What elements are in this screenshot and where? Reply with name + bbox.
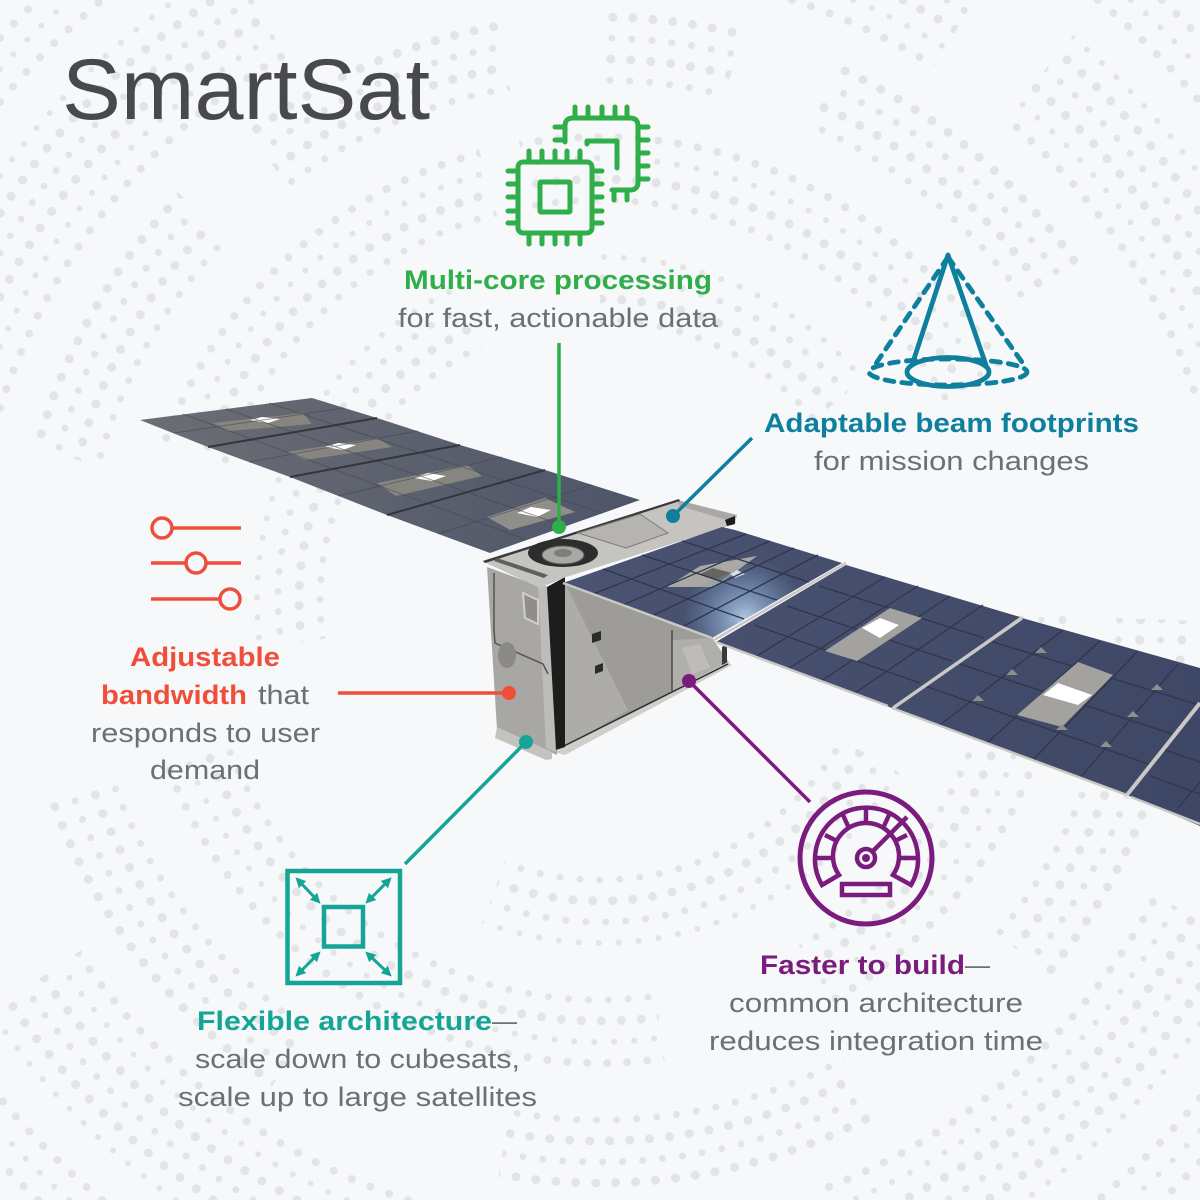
icon: speedometer (800, 792, 932, 924)
heading: faster to build: Faster to build (760, 950, 965, 980)
heading: adjustable bandwidth: responds to user (91, 718, 320, 748)
top plate (482, 500, 737, 588)
heading: faster to build: reduces integration time (709, 1026, 1043, 1056)
heading: adjustable bandwidth: that (258, 680, 310, 710)
near solar array (563, 527, 1200, 826)
heading: adaptable beam footprints: Adaptable beam footprints (764, 408, 1139, 438)
far solar array (140, 398, 640, 553)
heading: flexible architecture: scale down to cubesats, (195, 1044, 520, 1074)
heading: faster to build (709, 950, 1043, 1056)
leader: flexible architecture (405, 735, 533, 864)
left face (487, 567, 557, 755)
section 2 (716, 565, 1020, 708)
heading: adjustable bandwidth: bandwidth (101, 680, 247, 710)
section 4 (1127, 703, 1200, 826)
section 3 (892, 618, 1200, 795)
icon: flexible architecture (288, 871, 400, 983)
heading: faster to build: — (965, 950, 990, 980)
heading: adaptable beam footprints: for mission changes (814, 446, 1089, 476)
heading: adjustable bandwidth: demand (150, 755, 260, 785)
heading: flexible architecture (178, 1006, 537, 1112)
heading: flexible architecture: scale up to large satellites (178, 1082, 537, 1112)
heading: faster to build: common architecture (729, 988, 1023, 1018)
heading: multi-core processing (398, 265, 719, 333)
title: SmartSat (62, 42, 430, 138)
heading: adjustable bandwidth (91, 642, 320, 785)
right face (562, 583, 730, 750)
leader: adaptable beam (666, 438, 752, 523)
leader: adjustable bandwidth (338, 686, 516, 700)
heading: flexible architecture: Flexible architecture (197, 1006, 492, 1036)
leader: multi-core processing (552, 343, 566, 534)
heading: multi-core processing: for fast, actionable data (398, 303, 719, 333)
icon: multi-core chips (508, 107, 648, 244)
section 1 (563, 527, 842, 638)
heading: adaptable beam footprints (764, 408, 1139, 476)
heading: multi-core processing: Multi-core processing (404, 265, 712, 295)
heading: adjustable bandwidth: Adjustable (130, 642, 280, 672)
heading: flexible architecture: — (492, 1006, 517, 1036)
icon: bandwidth sliders (151, 518, 241, 609)
satellite body (482, 499, 737, 760)
leader: faster to build (682, 674, 810, 802)
black corner strip (547, 577, 565, 750)
icon: beam cone (869, 255, 1027, 386)
